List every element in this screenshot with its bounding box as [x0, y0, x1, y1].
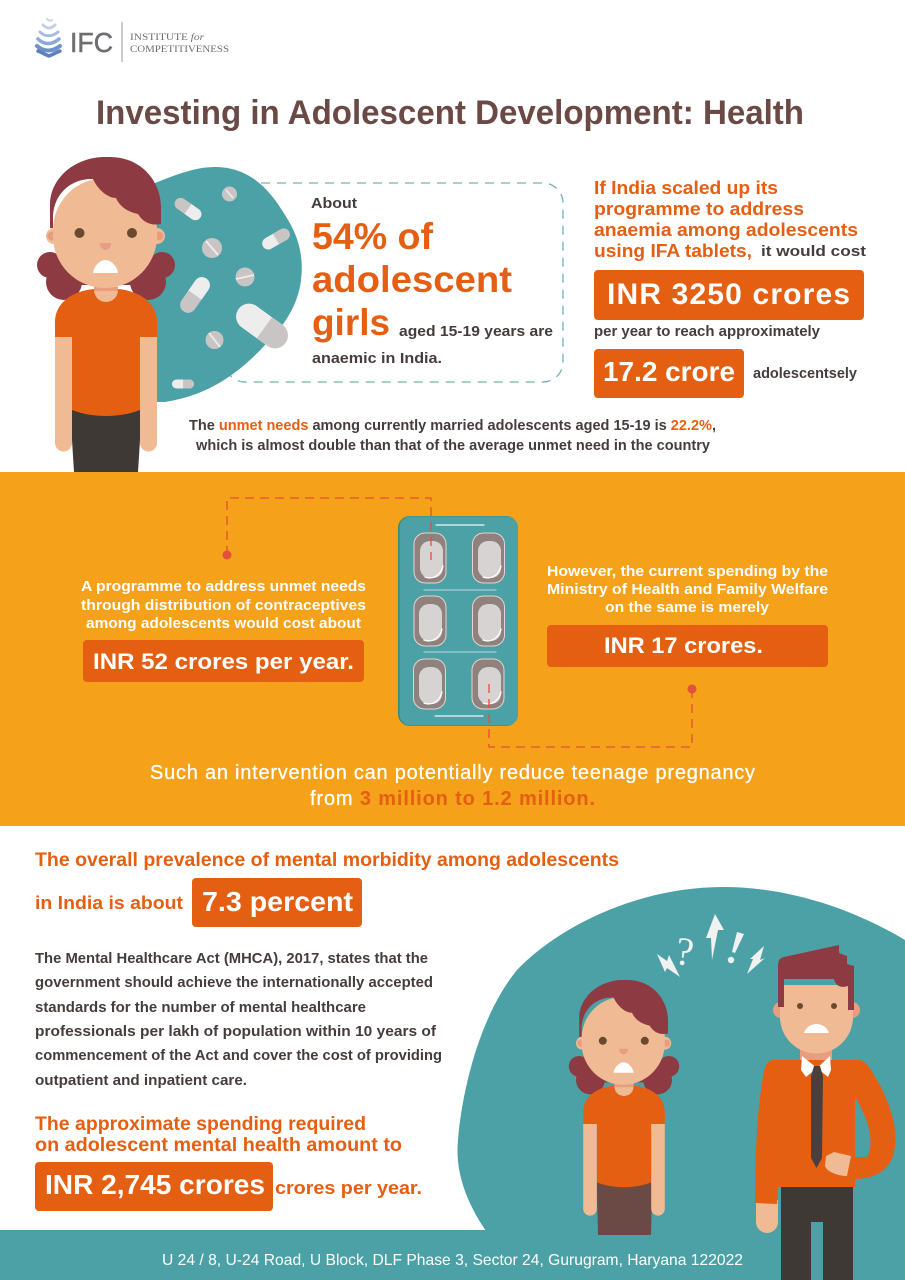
text: unmet needs: which is almost double than that of the average unmet need in the country [195, 438, 710, 454]
face [780, 985, 853, 1054]
teal blob with pills [130, 167, 302, 402]
trousers [781, 1185, 853, 1280]
callout: 7.3 percent [192, 878, 362, 927]
text: teenage pregnancy reduction: Such an intervention can potentially reduce teenage pregnancy [150, 762, 755, 784]
text: mental morbidity heading: in India is about [35, 893, 183, 913]
panel: anaemia dashed callout box [225, 183, 563, 382]
left hand [756, 1200, 778, 1233]
text: adolescentsely: adolescentsely [753, 366, 857, 382]
text: programme cost [81, 579, 366, 632]
text: MHCA paragraph: standards for the number of mental healthcare [35, 999, 366, 1016]
icon: capsule [177, 274, 213, 316]
callout: INR 52 crores per year: INR 52 crores per year. [93, 649, 354, 674]
icon: capsule [172, 195, 204, 223]
footer band [0, 1230, 905, 1280]
pills [419, 541, 501, 704]
logo: IFC Institute for Competitiveness: COMPETITIVENESS [130, 45, 229, 55]
logo: IFC Institute for Competitiveness [37, 19, 229, 62]
callout: INR 17 crores [547, 625, 828, 667]
illustration: man with tie [755, 945, 895, 1280]
text: IFA tablets scale-up cost [594, 177, 866, 261]
text: teenage pregnancy reduction: from 3 million to 1.2 million. [310, 788, 595, 810]
text: current spending [547, 564, 828, 616]
illustration: girl with skirt [569, 980, 679, 1235]
teal blob: mental health [457, 887, 905, 1231]
text: teenage pregnancy reduction [150, 762, 755, 810]
illustration: girl with anaemia [37, 157, 175, 472]
text: current spending: Ministry of Health and Family Welfare [547, 582, 828, 598]
mouth [804, 1024, 829, 1033]
text: unmet needs [189, 418, 716, 454]
text: MHCA paragraph: government should achieve the internationally accepted [35, 974, 433, 991]
text: IFA tablets scale-up cost: programme to address [594, 198, 804, 219]
icon: capsule [260, 226, 292, 252]
text: current spending: However, the current spending by the [547, 564, 828, 580]
text: programme cost: A programme to address unmet needs [81, 579, 366, 595]
footer address: U 24 / 8, U-24 Road, U Block, DLF Phase 3, Sector 24, Gurugram, Haryana 122022 [162, 1252, 743, 1269]
text: MHCA paragraph: commencement of the Act and cover the cost of providing [35, 1047, 442, 1064]
mouth [93, 260, 118, 273]
shirt [55, 289, 157, 416]
text: unmet needs: The unmet needs among currently married adolescents aged 15-19 is 22.2%, [189, 418, 716, 434]
text: MHCA paragraph: professionals per lakh of population within 10 years of [35, 1023, 437, 1040]
logo wordmark: IFC [70, 27, 113, 58]
title: Investing in Adolescent Development: Health [96, 94, 804, 132]
dashed connector left [222, 498, 431, 560]
panel: contraceptives band [0, 472, 905, 826]
text: IFA tablets scale-up cost: anaemia among adolescents [594, 219, 858, 240]
pill pockets [414, 533, 504, 709]
callout: 7.3 percent: 7.3 percent [202, 886, 353, 917]
pants [72, 405, 140, 472]
callout: INR 2,745 crores: INR 2,745 crores [45, 1169, 265, 1200]
icon: wheat leaf emblem [37, 19, 60, 56]
icon: small capsule [172, 380, 194, 388]
text: IFA tablets scale-up cost: using IFA tablets, [594, 240, 752, 261]
callout: INR 52 crores per year [83, 640, 364, 682]
nose [100, 243, 111, 250]
face [53, 178, 157, 288]
text: programme cost: through distribution of contraceptives [81, 598, 366, 614]
callout: 17.2 crore: 17.2 crore [603, 356, 735, 387]
hair [778, 945, 854, 1010]
pill highlights [424, 566, 501, 704]
neck [800, 1040, 832, 1070]
icon: large capsule [231, 298, 293, 354]
icon: tablets [202, 186, 254, 349]
text: about 54% of adolescent girls: anaemic in India. [312, 351, 442, 367]
text: about 54% of adolescent girls: About [311, 196, 357, 212]
neck [94, 280, 118, 302]
hair [50, 157, 161, 228]
logo tagline: INSTITUTE for [130, 32, 204, 43]
text: MHCA paragraph: outpatient and inpatient care. [35, 1072, 247, 1089]
tie [811, 1066, 823, 1168]
fist [825, 1152, 851, 1176]
skirt [597, 1180, 652, 1235]
callout: INR 3250 crores: INR 3250 crores [607, 278, 850, 311]
text: mental morbidity heading [35, 850, 619, 913]
text: mental morbidity heading: The overall prevalence of mental morbidity among adolescents [35, 850, 619, 871]
arms [55, 337, 72, 452]
callout: INR 2,745 crores [35, 1162, 273, 1211]
text: spending required [35, 1114, 402, 1156]
dashed connector right [489, 684, 696, 747]
ears [46, 228, 62, 244]
callout: INR 3250 crores [594, 270, 864, 320]
text: about 54% of adolescent girls: 54% of [312, 216, 434, 257]
text: about 54% of adolescent girls [311, 196, 553, 367]
text: MHCA paragraph [35, 950, 442, 1089]
hair lobes [37, 252, 175, 300]
shirt and arms [755, 1060, 895, 1204]
ears [773, 1002, 789, 1018]
icon: stress symbols: ? [673, 928, 697, 975]
text: IFA tablets scale-up cost: it would cost [761, 244, 866, 260]
icon: stress symbols [657, 914, 765, 977]
callout: 17.2 crore [594, 349, 744, 398]
text: per year to reach: per year to reach approximately [594, 324, 820, 340]
text: about 54% of adolescent girls: girls [312, 302, 390, 343]
text: crores per year: crores per year. [275, 1178, 422, 1198]
text: IFA tablets scale-up cost: If India scaled up its [594, 177, 778, 198]
icon: blister pack [398, 516, 518, 726]
text: MHCA paragraph: The Mental Healthcare Act (MHCA), 2017, states that the [35, 950, 428, 967]
text: current spending: on the same is merely [605, 600, 769, 616]
callout: INR 17 crores: INR 17 crores. [604, 633, 763, 658]
collar [801, 1056, 831, 1077]
text: spending required: on adolescent mental health amount to [35, 1135, 402, 1156]
eyes [74, 228, 84, 238]
eyes [797, 1003, 803, 1009]
text: about 54% of adolescent girls: aged 15-19 years are [399, 324, 553, 340]
text: about 54% of adolescent girls: adolescent [312, 259, 512, 300]
text: programme cost: among adolescents would cost about [86, 616, 361, 632]
text: spending required: The approximate spending required [35, 1114, 366, 1135]
